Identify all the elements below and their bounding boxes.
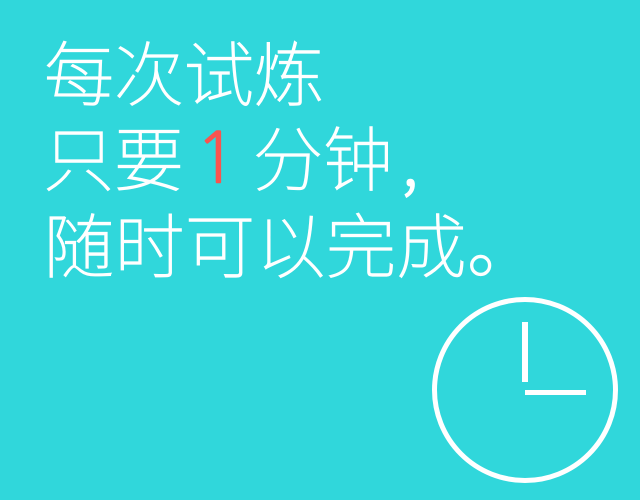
title: line 3: 随时可以完成。: [44, 192, 538, 293]
highlighted number 1: 1: [195, 124, 237, 194]
title: line 2: 分钟: [253, 105, 393, 206]
title: line 2: [44, 105, 418, 206]
title: line 2: ,: [402, 105, 418, 206]
title: line 2: 只要: [44, 105, 184, 206]
title: line 1: 每次试炼: [44, 20, 324, 121]
